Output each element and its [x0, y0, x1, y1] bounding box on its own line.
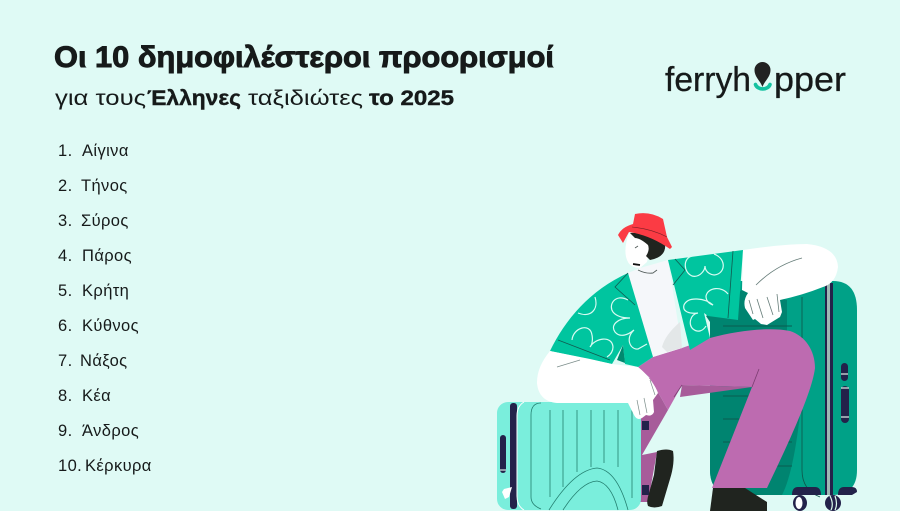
destinations list [58, 142, 152, 475]
head with hat [618, 213, 672, 273]
upper leg [638, 329, 815, 488]
destinations list: 10. [58, 457, 82, 475]
destinations list: Σύρος [81, 212, 129, 230]
logo: ferryhopper: pper [774, 61, 846, 99]
logo: ferryhopper: ferryh [665, 61, 751, 99]
destinations list: 7. [58, 352, 73, 370]
destinations list: Πάρος [82, 247, 132, 265]
destinations list: Άνδρος [82, 422, 139, 440]
destinations list: 4. [58, 247, 73, 265]
subtitle: Έλληνες [147, 86, 241, 110]
subtitle: το 2025 [369, 86, 454, 110]
illustration: traveller with suitcases [497, 213, 857, 511]
subtitle [55, 86, 454, 110]
destinations list: Αίγινα [82, 142, 129, 160]
subtitle: για τους [55, 86, 146, 110]
left arm and hand [537, 351, 658, 419]
destinations list: 3. [58, 212, 73, 230]
left suitcase [497, 402, 649, 510]
logo: ferryhopper [665, 61, 846, 99]
destinations list: 1. [58, 142, 73, 160]
lower leg [640, 375, 668, 502]
destinations list: 9. [58, 422, 73, 440]
right suitcase [706, 281, 857, 511]
destinations list: Κέρκυρα [85, 457, 152, 475]
title: Οι 10 δημοφιλέστεροι προορισμοί [54, 41, 554, 74]
destinations list: Κέα [82, 387, 111, 405]
destinations list: 5. [58, 282, 73, 300]
front shoe [647, 450, 674, 508]
subtitle: ταξιδιώτες [248, 86, 363, 110]
destinations list: Κύθνος [82, 317, 139, 335]
destinations list: 8. [58, 387, 73, 405]
right arm and hand [742, 244, 838, 325]
destinations list: 2. [58, 177, 73, 195]
destinations list: Τήνος [81, 177, 128, 195]
destinations list: Κρήτη [82, 282, 129, 300]
shirt [550, 250, 743, 367]
destinations list: Νάξος [80, 352, 128, 370]
destinations list: 6. [58, 317, 73, 335]
white t-shirt [628, 260, 682, 357]
back shoe [710, 488, 767, 511]
